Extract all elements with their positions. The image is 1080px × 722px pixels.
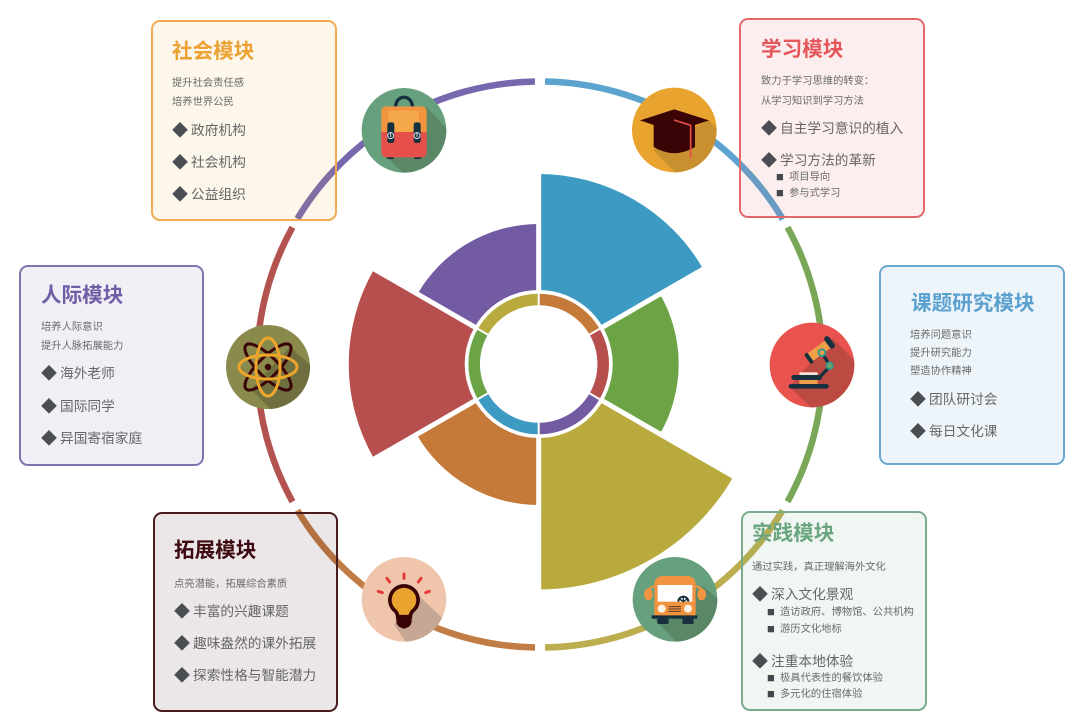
panel: 拓展模块 bbox=[153, 512, 338, 712]
central chart and ring with icons bbox=[226, 78, 854, 651]
list item: 国际同学 bbox=[60, 399, 115, 414]
sub item: 游历文化地标 bbox=[780, 624, 842, 635]
list item: ◆ bbox=[910, 392, 926, 409]
icon: atom bbox=[226, 325, 310, 409]
list item: 每日文化课 bbox=[929, 424, 997, 439]
list item bbox=[752, 586, 853, 604]
text block: 提升研究能力 bbox=[910, 348, 972, 359]
icon: light bulb bbox=[362, 557, 446, 642]
list item: ◆ bbox=[761, 153, 777, 170]
ring arc: orange bbox=[297, 510, 535, 648]
heading: 学习模块 bbox=[761, 38, 843, 61]
list item: ◆ bbox=[41, 399, 57, 416]
sector: olive bbox=[539, 364, 734, 590]
icon: bus bbox=[632, 557, 718, 642]
heading: 实践模块 bbox=[752, 522, 834, 545]
list item bbox=[41, 430, 142, 448]
list item: 海外老师 bbox=[60, 366, 115, 381]
outer ring bbox=[257, 82, 823, 648]
sub item: 项目导向 bbox=[789, 172, 830, 183]
sub item bbox=[776, 185, 840, 200]
ring arc: blue bbox=[545, 82, 783, 219]
sub item: 造访政府、博物馆、公共机构 bbox=[780, 607, 914, 618]
list item: ◆ bbox=[174, 604, 190, 621]
list item: ◆ bbox=[41, 366, 57, 383]
sub item: ■ bbox=[776, 169, 784, 184]
list item: ◆ bbox=[910, 424, 926, 441]
ring arc: olive bbox=[545, 510, 783, 648]
heading: 社会模块 bbox=[172, 40, 254, 63]
list item bbox=[761, 152, 876, 170]
text block: 塑造协作精神 bbox=[910, 366, 972, 377]
text block: 通过实践，真正理解海外文化 bbox=[752, 562, 886, 573]
sub item bbox=[767, 686, 862, 701]
list item: 趣味盎然的课外拓展 bbox=[193, 636, 316, 651]
ring arc: purple bbox=[297, 82, 535, 219]
list item: ◆ bbox=[752, 587, 768, 604]
list item: 丰富的兴趣课题 bbox=[193, 604, 289, 619]
text block: 提升社会责任感 bbox=[172, 78, 244, 89]
sub item: ■ bbox=[767, 686, 775, 701]
panel: 学习模块 bbox=[739, 18, 925, 218]
list item: ◆ bbox=[172, 187, 188, 204]
sub item: ■ bbox=[767, 604, 775, 619]
list item bbox=[752, 653, 853, 671]
text block: 培养问题意识 bbox=[910, 330, 972, 341]
list item: 政府机构 bbox=[191, 123, 246, 138]
text block: 提升人脉拓展能力 bbox=[41, 341, 123, 352]
sub item: 参与式学习 bbox=[789, 188, 840, 199]
text block: 点亮潜能，拓展综合素质 bbox=[174, 579, 287, 590]
inner ring bbox=[474, 300, 603, 428]
sector: red bbox=[349, 269, 539, 459]
sector: purple bbox=[418, 224, 539, 364]
text block: 从学习知识到学习方法 bbox=[761, 96, 864, 106]
list item: 探索性格与智能潜力 bbox=[193, 668, 316, 683]
sub item: ■ bbox=[767, 621, 775, 636]
text block: 培养世界公民 bbox=[172, 97, 234, 108]
icon: graduation cap bbox=[632, 88, 717, 172]
list item bbox=[910, 391, 997, 409]
ring arc: red bbox=[257, 227, 292, 502]
panel: 实践模块 bbox=[741, 511, 927, 711]
list item: 深入文化景观 bbox=[771, 587, 853, 602]
polar chart bbox=[342, 160, 735, 600]
ring arc: green bbox=[788, 227, 823, 502]
list item: ◆ bbox=[41, 431, 57, 448]
list item: 注重本地体验 bbox=[771, 654, 853, 669]
sub item: 多元化的住宿体验 bbox=[780, 689, 862, 700]
heading: 人际模块 bbox=[41, 284, 123, 307]
list item: 社会机构 bbox=[191, 155, 246, 170]
list item bbox=[910, 423, 997, 441]
list item: ◆ bbox=[174, 668, 190, 685]
sector: green bbox=[539, 294, 679, 434]
sub item bbox=[767, 604, 914, 619]
list item bbox=[172, 154, 246, 172]
list item bbox=[41, 398, 115, 416]
panel: 课题研究模块 bbox=[879, 265, 1065, 465]
sub item: ■ bbox=[767, 670, 775, 685]
sector: blue bbox=[539, 174, 703, 364]
sub item bbox=[767, 621, 842, 636]
heading: 拓展模块 bbox=[174, 539, 256, 562]
sector: orange bbox=[417, 364, 539, 505]
heading: 课题研究模块 bbox=[911, 292, 1035, 315]
text block: 培养人际意识 bbox=[41, 322, 103, 333]
list item: 团队研讨会 bbox=[929, 392, 997, 407]
panel: 社会模块 bbox=[151, 20, 337, 221]
list item: ◆ bbox=[761, 121, 777, 138]
text block: 致力于学习思维的转变： bbox=[761, 76, 874, 87]
list item bbox=[41, 365, 115, 383]
sub item: 极具代表性的餐饮体验 bbox=[780, 673, 883, 684]
sub item bbox=[776, 169, 830, 184]
icon: backpack bbox=[362, 88, 446, 173]
icon: microscope bbox=[770, 322, 854, 408]
list item: ◆ bbox=[174, 636, 190, 653]
list item: ◆ bbox=[172, 155, 188, 172]
list item: 自主学习意识的植入 bbox=[780, 121, 903, 136]
list item bbox=[172, 186, 246, 204]
list item: 学习方法的革新 bbox=[780, 153, 876, 168]
sub item bbox=[767, 670, 883, 685]
sub item: ■ bbox=[776, 185, 784, 200]
list item: 异国寄宿家庭 bbox=[60, 431, 142, 446]
list item: ◆ bbox=[172, 123, 188, 140]
panel: 人际模块 bbox=[19, 265, 204, 466]
list item: 公益组织 bbox=[191, 187, 246, 202]
list item bbox=[174, 603, 289, 621]
list item: ◆ bbox=[752, 654, 768, 671]
list item bbox=[172, 122, 246, 140]
